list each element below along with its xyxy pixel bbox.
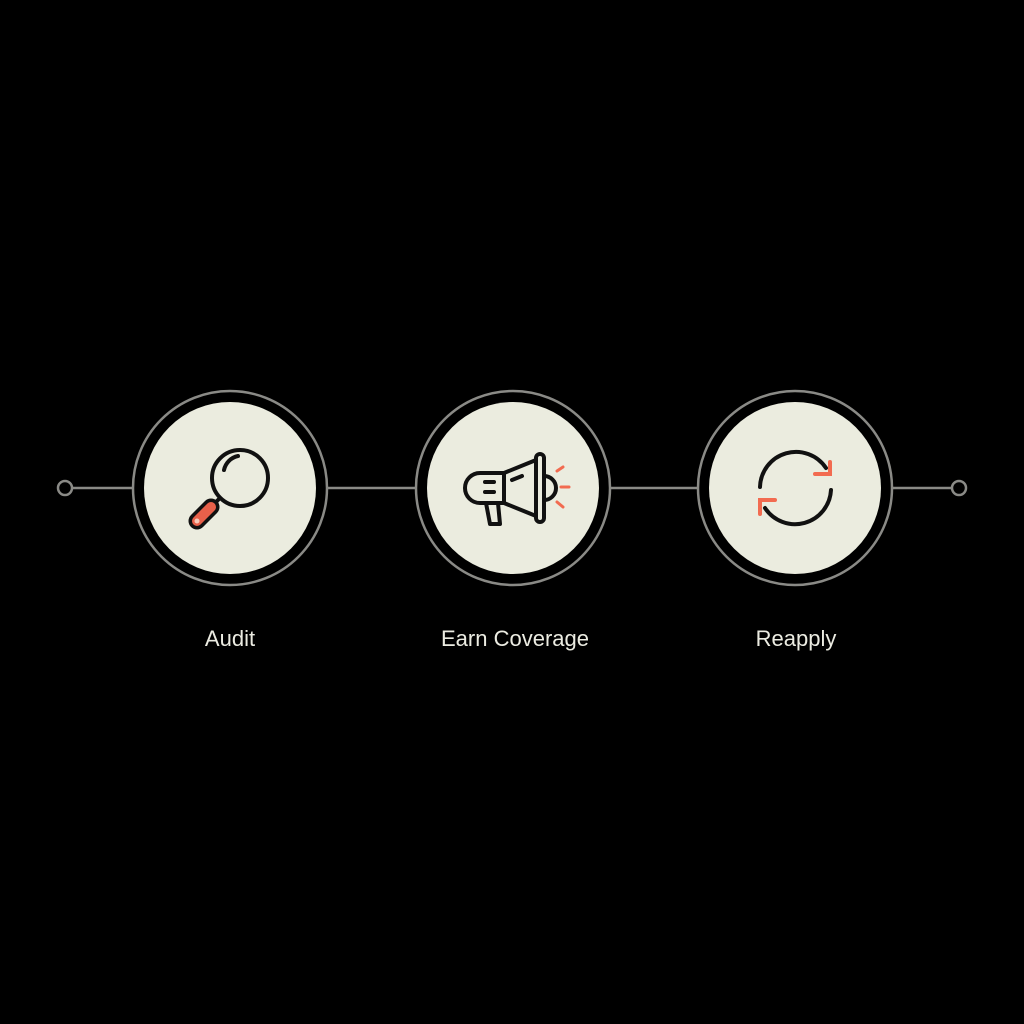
icon: megaphone [465, 454, 556, 524]
connector line [58, 481, 966, 495]
icon: magnifying glass [194, 450, 268, 524]
icon: refresh arrows [760, 452, 831, 524]
label: Audit: Audit [205, 626, 255, 651]
label: Earn Coverage: Earn Coverage [441, 626, 589, 651]
step 2 circle: earn coverage [416, 391, 610, 585]
step 1 circle: audit [133, 391, 327, 585]
label: Reapply: Reapply [756, 626, 836, 651]
step 3 circle: reapply [698, 391, 892, 585]
